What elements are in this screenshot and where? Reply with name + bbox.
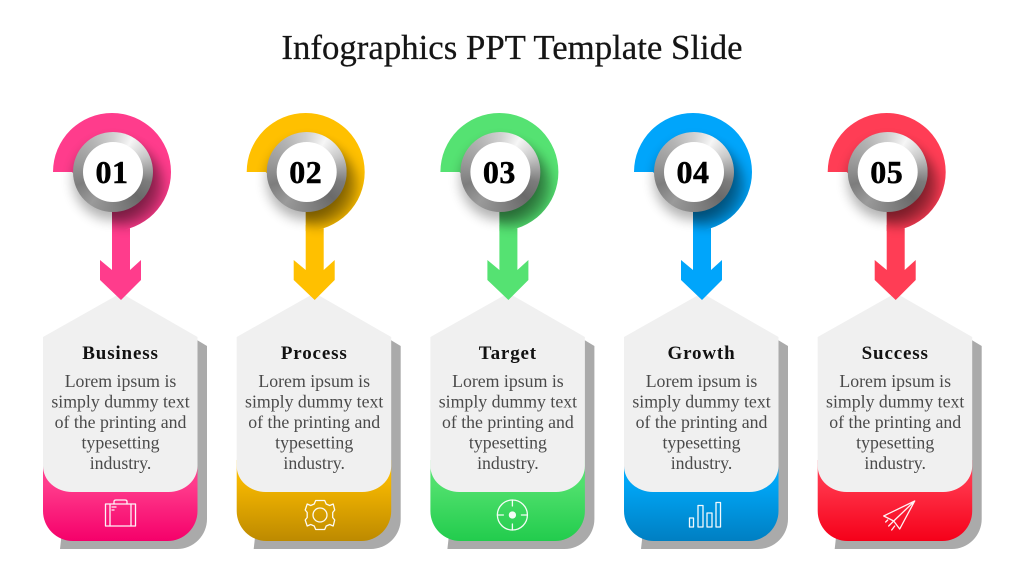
body text: Lorem ipsum is: [839, 371, 951, 391]
ring arrow: [634, 113, 752, 300]
number: 04: [676, 154, 710, 190]
metal number badge: [848, 132, 928, 212]
ring arrow: [440, 113, 558, 300]
number: 01: [96, 154, 128, 190]
card body: [237, 293, 391, 492]
body text: Lorem ipsum is: [646, 371, 757, 391]
ring arrow: [53, 113, 171, 300]
body text: simply dummy text: [245, 392, 383, 412]
body text: industry.: [864, 453, 926, 473]
panel: 04 Growth: [624, 113, 788, 549]
body text: typesetting: [469, 432, 547, 452]
panel: 05 Success: [818, 113, 982, 549]
heading: Success: [862, 343, 929, 364]
icon: paper plane: [884, 501, 915, 530]
heading: Target: [479, 343, 537, 364]
metal number badge: [73, 132, 153, 212]
body text: of the printing and: [442, 412, 574, 432]
body text: of the printing and: [248, 412, 380, 432]
body text: [245, 371, 383, 473]
icon: briefcase: [106, 500, 136, 526]
body text: typesetting: [275, 432, 353, 452]
body text: industry.: [283, 453, 345, 473]
card shadow: [835, 340, 982, 549]
number: 05: [870, 154, 903, 190]
heading: Growth: [667, 343, 736, 364]
metal number badge: [460, 132, 540, 212]
metal number badge: [654, 132, 734, 212]
body text: simply dummy text: [826, 392, 964, 412]
body text: simply dummy text: [51, 392, 190, 412]
body text: typesetting: [662, 432, 741, 452]
colored footer: [430, 460, 585, 541]
card body: [430, 293, 585, 492]
body text: typesetting: [81, 432, 160, 452]
card body: [818, 293, 972, 492]
icon: target: [497, 500, 527, 530]
number: 02: [289, 154, 322, 190]
icon: gear: [305, 500, 335, 530]
body text: simply dummy text: [439, 392, 577, 412]
metal number badge: [267, 132, 347, 212]
card body: [624, 293, 778, 492]
panel: 02 Process: [237, 113, 401, 549]
body text: [51, 371, 190, 473]
body text: industry.: [671, 453, 732, 473]
number: 03: [483, 154, 516, 190]
body text: of the printing and: [636, 412, 768, 432]
body text: industry.: [477, 453, 539, 473]
body text: typesetting: [856, 432, 934, 452]
ring arrow: [828, 113, 946, 300]
title: Infographics PPT Template Slide: [281, 28, 743, 67]
body text: of the printing and: [829, 412, 961, 432]
colored footer: [237, 460, 391, 541]
body text: Lorem ipsum is: [65, 371, 176, 391]
body text: [632, 371, 771, 473]
heading: Business: [82, 343, 159, 364]
card shadow: [447, 340, 594, 549]
colored footer: [43, 460, 198, 541]
body text: of the printing and: [55, 412, 187, 432]
card shadow: [60, 340, 207, 549]
ring arrow: [247, 113, 365, 300]
body text: Lorem ipsum is: [258, 371, 370, 391]
colored footer: [818, 460, 972, 541]
panel: 01 Business: [43, 113, 207, 549]
body text: Lorem ipsum is: [452, 371, 564, 391]
card shadow: [641, 340, 788, 549]
card body: [43, 293, 198, 492]
icon: bar chart: [690, 502, 720, 527]
panel: 03 Target: [430, 113, 594, 549]
body text: [826, 371, 964, 473]
colored footer: [624, 460, 778, 541]
heading: Process: [281, 343, 348, 364]
body text: [439, 371, 577, 473]
card shadow: [254, 340, 401, 549]
body text: industry.: [90, 453, 151, 473]
body text: simply dummy text: [632, 392, 771, 412]
